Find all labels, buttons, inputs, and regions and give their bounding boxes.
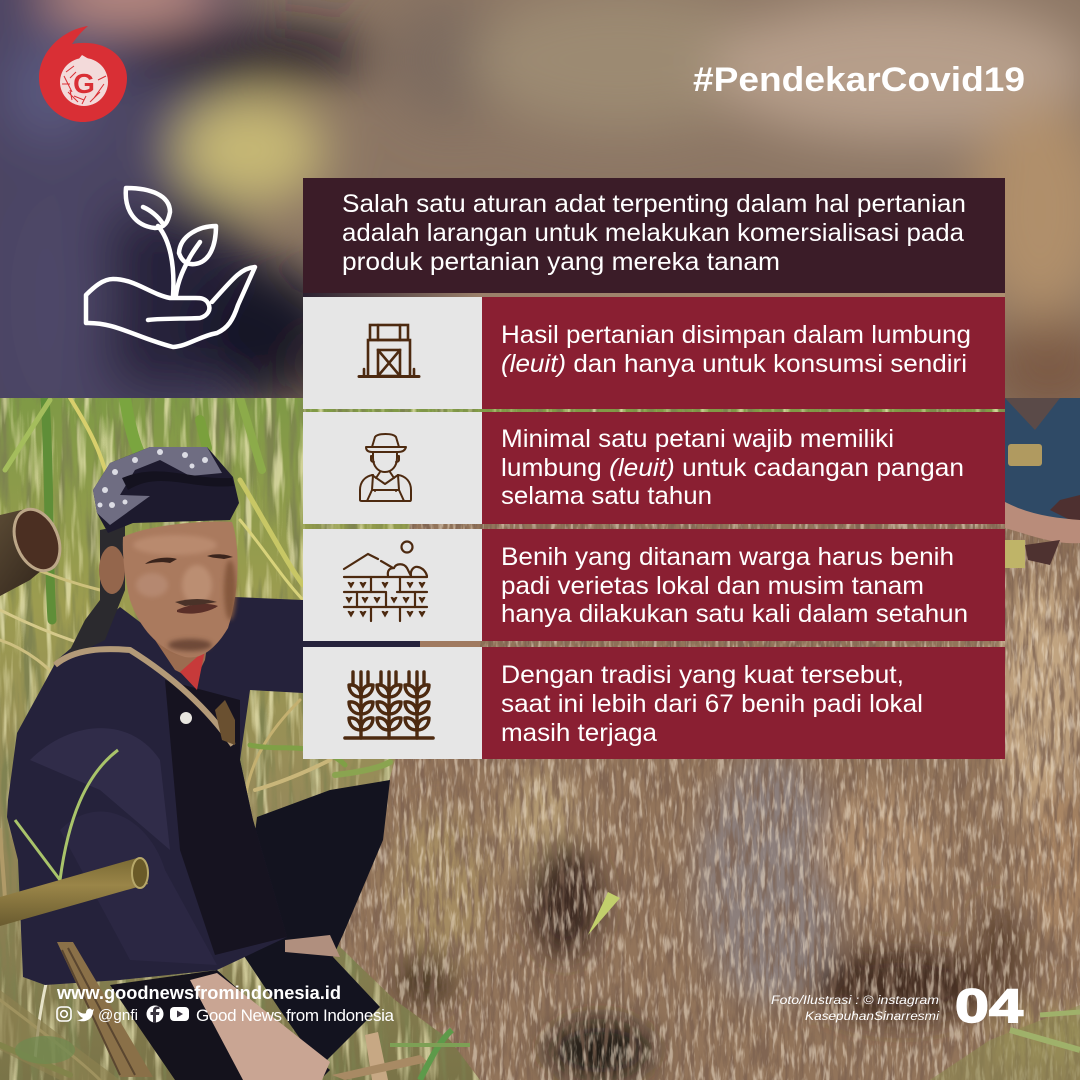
farmer <box>7 447 390 1080</box>
icon: rice terrace <box>344 542 427 621</box>
panel: intro statement: adalah larangan untuk melakukan komersialisasi pada <box>342 219 964 247</box>
panel: row 2 farmer <box>303 412 1005 524</box>
logo <box>39 26 127 122</box>
panel: row 3 fields: hanya dilakukan satu kali dalam setahun <box>501 600 968 628</box>
logo emblem <box>60 58 108 106</box>
lower body shadow <box>110 970 330 1080</box>
footer: website and social handles: @gnfi <box>98 1007 138 1024</box>
grass blade and lower bamboo <box>0 750 148 926</box>
footer: website and social handles: www.goodnewsfromindonesia.id <box>56 983 341 1003</box>
panel: row 3 fields: padi verietas lokal dan musim tanam <box>501 572 924 600</box>
panel: row 2 farmer: Minimal satu petani wajib memiliki <box>501 425 894 453</box>
logo: G <box>73 68 95 99</box>
face <box>123 522 238 658</box>
panel: row 1 granary: Hasil pertanian disimpan dalam lumbung <box>501 321 971 349</box>
icon: youtube <box>170 1007 189 1021</box>
arm behind panels <box>303 641 420 647</box>
icon: wheat <box>345 672 433 738</box>
panel: row 3 fields: Benih yang ditanam warga harus benih <box>501 543 954 571</box>
panel: row 4 local seeds: saat ini lebih dari 67 benih padi lokal <box>501 690 923 718</box>
icon: sprout in hand <box>86 188 255 347</box>
neck and undershirt <box>154 640 206 674</box>
logo red swirl <box>39 26 127 122</box>
panel: row 4 local seeds <box>303 647 1005 759</box>
reed bundle bottom <box>0 942 470 1080</box>
icon: farmer <box>360 434 411 501</box>
icon: instagram <box>57 1007 71 1021</box>
photo credit: KasepuhanSinarresmi <box>805 1009 939 1023</box>
photo: farmer beside rice bundle <box>0 398 1080 1080</box>
panel: row 4 local seeds: Dengan tradisi yang kuat tersebut, <box>501 661 904 689</box>
trousers <box>240 780 390 1067</box>
footer: website and social handles: Good News from Indonesia <box>196 1006 395 1025</box>
page number: 04 <box>955 979 1023 1032</box>
rice bundle <box>300 520 1080 1080</box>
panel: row 4 local seeds: masih terjaga <box>501 719 657 747</box>
panel: intro statement: produk pertanian yang mereka tanam <box>342 248 780 276</box>
panel: row 2 farmer: selama satu tahun <box>501 482 712 510</box>
photo credit: Foto/Ilustrasi : © instagram <box>771 993 939 1007</box>
panel: row 1 granary <box>303 297 1005 409</box>
photo credit <box>771 993 939 1023</box>
headwrap <box>93 447 239 533</box>
separator strip <box>303 293 1005 297</box>
panel: row 2 farmer: lumbung (leuit) untuk cadangan pangan <box>501 454 964 482</box>
blurred top background <box>0 0 1080 398</box>
shirt <box>7 597 303 985</box>
panel: row 1 granary: (leuit) dan hanya untuk konsumsi sendiri <box>501 350 967 378</box>
icon: barn <box>359 325 419 376</box>
icon: twitter <box>77 1009 94 1021</box>
strap <box>55 649 233 745</box>
man at top right corner <box>1005 398 1080 568</box>
footer: website and social handles <box>56 983 395 1025</box>
grass bottom right <box>930 1005 1080 1080</box>
hashtag heading: #PendekarCovid19 <box>693 61 1025 99</box>
panel: row 3 fields <box>303 529 1005 641</box>
grass background <box>0 398 1080 1080</box>
hair <box>68 526 125 653</box>
icon: facebook <box>146 1006 164 1023</box>
panel: intro statement: Salah satu aturan adat terpenting dalam hal pertanian <box>342 190 966 218</box>
ear <box>99 546 125 594</box>
bamboo tube top left <box>0 508 62 596</box>
forearm <box>190 973 330 1080</box>
panel: intro statement <box>303 178 1005 293</box>
